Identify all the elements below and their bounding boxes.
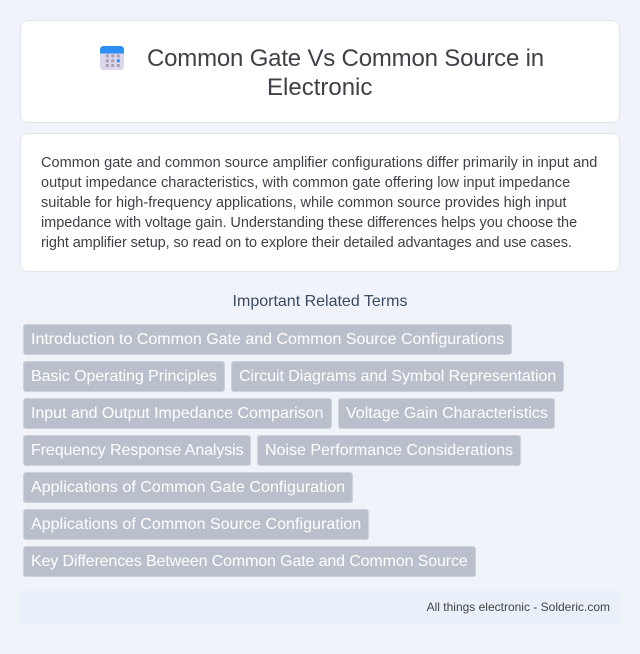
tag: Introduction to Common Gate and Common Source Configurations [31,331,504,348]
tag [23,324,512,355]
footer credit: All things electronic - Solderic.com [427,600,610,614]
footer bar [20,590,620,624]
tag: Applications of Common Source Configuration [31,516,361,533]
tag [257,435,521,466]
title: Common Gate Vs Common Source in [147,45,544,72]
tag: Frequency Response Analysis [31,442,244,459]
panel: title card [20,20,620,123]
tag [23,546,476,577]
text block: description [41,155,597,251]
tag [231,361,564,392]
text block: description: suitable for high-frequency applications, while common source provides high input [41,195,567,211]
tag [23,398,332,429]
panel: description [20,133,620,272]
tag [23,435,251,466]
tag: Key Differences Between Common Gate and Common Source [31,553,468,570]
tag: Noise Performance Considerations [265,442,513,459]
heading: important related terms: Important Related Terms [233,293,407,310]
tag: Basic Operating Principles [31,368,217,385]
tag [338,398,555,429]
text block: description: output impedance characteristics, with common gate offering low input impedance [41,175,570,191]
tag [23,472,353,503]
tag: Input and Output Impedance Comparison [31,405,323,422]
text block: description: impedance with voltage gain. Understanding these differences helps you choose the [41,215,577,231]
text block: description: Common gate and common source amplifier configurations differ primarily in input and [41,155,597,171]
title: Electronic [267,74,372,101]
tag: Circuit Diagrams and Symbol Representation [239,368,556,385]
title [147,45,544,101]
tag: Applications of Common Gate Configuration [31,479,345,496]
tag [23,509,369,540]
text block: description: right amplifier setup, so read on to explore their detailed advantages and use cases. [41,235,572,251]
tag [23,361,225,392]
icon: calendar [100,46,124,70]
panel: related term tags [23,324,564,577]
tag: Voltage Gain Characteristics [346,405,548,422]
